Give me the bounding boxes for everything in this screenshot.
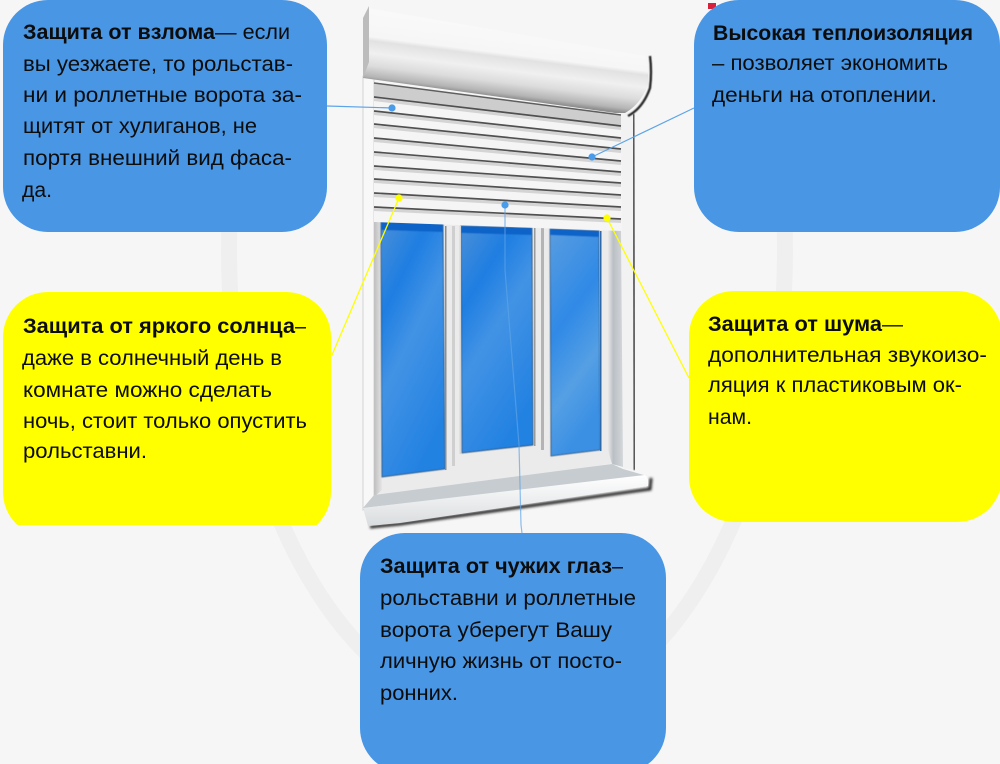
text: sun protection — [22, 315, 307, 463]
mullions — [445, 226, 602, 470]
small red mark — [708, 3, 716, 9]
text: noise protection: ляция к пластиковым ок- — [708, 374, 962, 397]
text: sun protection: Защита от яркого солнца — [23, 315, 295, 338]
blue leader: break-in protection — [327, 104, 396, 112]
text: sun protection: даже в солнечный день в — [22, 347, 282, 370]
text: privacy protection — [380, 555, 636, 705]
text: break-in protection: портя внешний вид фаса- — [23, 147, 292, 170]
window sill — [363, 464, 651, 527]
panel: heat insulation — [694, 0, 1000, 232]
window frame background — [374, 220, 622, 500]
text: break-in protection: ни и роллетные ворота за- — [23, 84, 302, 107]
left inner frame — [374, 220, 382, 497]
shutter box — [363, 6, 651, 116]
text: sun protection: комнате можно сделать — [23, 379, 272, 402]
right reveal — [608, 228, 623, 467]
panel: break-in protection — [3, 0, 327, 232]
text: break-in protection: вы уезжаете, то рольстав- — [23, 53, 293, 76]
text: break-in protection: щитят от хулиганов, не — [23, 115, 257, 138]
text: heat insulation: Высокая теплоизоляция — [713, 22, 973, 45]
text: noise protection — [708, 313, 987, 429]
panel: noise protection — [689, 291, 1000, 522]
text: noise protection: — — [882, 313, 903, 336]
text: noise protection: нам. — [708, 406, 752, 429]
text: heat insulation: деньги на отоплении. — [712, 84, 937, 107]
shutter curtain — [374, 83, 622, 231]
yellow leader: sun protection — [332, 194, 403, 355]
text: noise protection: Защита от шума — [708, 313, 882, 336]
text: break-in protection: Защита от взлома — [23, 21, 215, 44]
text: heat insulation — [712, 22, 973, 107]
text: sun protection: рольставни. — [23, 440, 147, 463]
blue leader: heat insulation — [588, 108, 694, 161]
panel: privacy protection — [360, 533, 666, 764]
yellow leader: noise protection — [603, 214, 689, 378]
text: privacy protection: ронних. — [380, 682, 458, 705]
text: privacy protection: ворота уберегут Вашу — [380, 619, 613, 642]
text: privacy protection: Защита от чужих глаз — [380, 555, 612, 578]
text: sun protection: – — [295, 315, 306, 338]
text: privacy protection: – — [612, 555, 623, 578]
blue leader: privacy protection — [501, 201, 522, 533]
decorative ring behind window — [229, 0, 785, 717]
panel: sun protection — [3, 292, 331, 537]
text: privacy protection: рольставни и роллетные — [380, 587, 636, 610]
glass panes — [381, 222, 600, 477]
text: privacy protection: личную жизнь от посто- — [380, 650, 622, 673]
text: break-in protection: — если — [215, 21, 290, 44]
right jamb shadow line — [634, 114, 635, 470]
text: noise protection: дополнительная звукоизо- — [708, 344, 987, 367]
window illustration — [363, 6, 651, 527]
text: sun protection: ночь, стоит только опустить — [23, 410, 307, 433]
text: heat insulation: – позволяет экономить — [712, 52, 948, 75]
text: break-in protection: да. — [22, 179, 52, 202]
left jamb — [363, 76, 374, 510]
right jamb — [620, 112, 634, 470]
leader lines and dots — [327, 104, 694, 533]
text: break-in protection — [22, 21, 302, 202]
